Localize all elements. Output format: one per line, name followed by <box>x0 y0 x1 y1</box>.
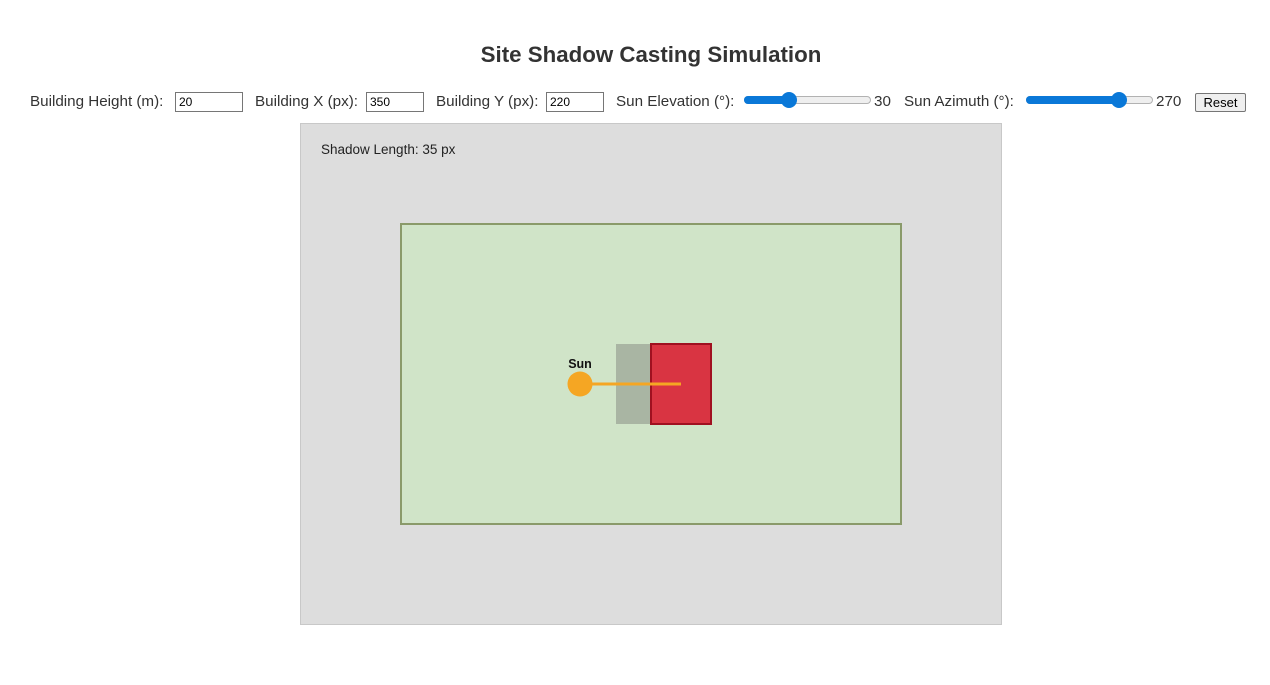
input: x: 350 <box>370 95 390 109</box>
shadow <box>616 344 651 424</box>
sun ray <box>580 382 681 386</box>
input: y <box>546 92 604 112</box>
label: sun azimuth: Sun Azimuth (°): <box>904 93 1014 110</box>
title: Site Shadow Casting Simulation <box>481 42 821 67</box>
label: building y: Building Y (px): <box>436 93 538 110</box>
label: building x: Building X (px): <box>255 93 358 110</box>
label: sun elevation: Sun Elevation (°): <box>616 93 734 110</box>
value: 30: 30 <box>874 93 891 110</box>
shadow length text: Shadow Length: 35 px <box>321 142 456 157</box>
input: height <box>175 92 243 112</box>
input: x <box>366 92 424 112</box>
reset button <box>1195 93 1246 112</box>
value: 270: 270 <box>1156 93 1181 110</box>
input: y: 220 <box>550 95 570 109</box>
slider: azimuth <box>1026 96 1153 104</box>
sun: Sun <box>568 357 592 371</box>
building <box>651 344 711 424</box>
simulation canvas <box>300 123 1002 625</box>
site area <box>401 224 901 524</box>
controls row <box>30 92 1246 112</box>
input: height: 20 <box>179 95 192 109</box>
reset button: Reset <box>1204 95 1237 110</box>
sun <box>568 357 592 396</box>
slider: elevation <box>744 96 871 104</box>
label: building height: Building Height (m): <box>30 93 163 110</box>
